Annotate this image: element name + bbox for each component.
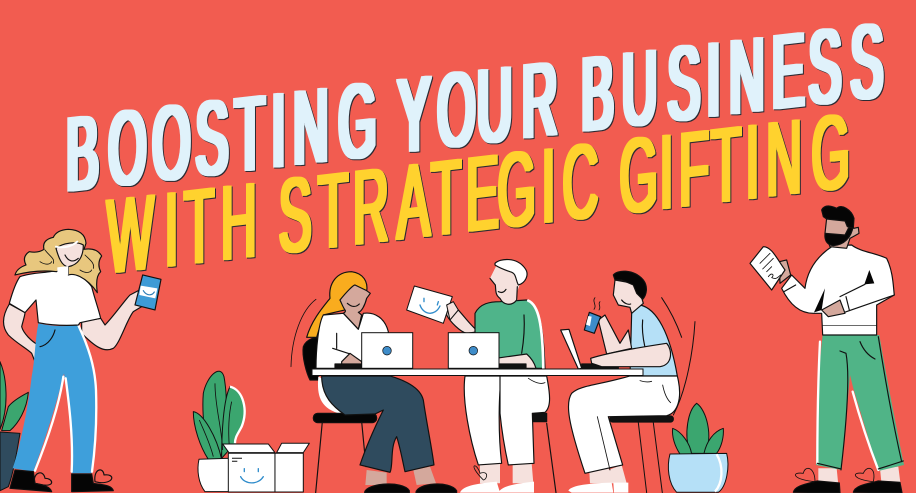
forearm [493,354,536,368]
sweater [475,300,545,368]
blue pot plant [668,403,728,492]
gift box [223,443,309,492]
smiley card [407,286,458,323]
document [750,247,785,290]
trousers [13,323,97,473]
potted plant [193,371,245,492]
forearm with mug [598,315,632,354]
underarm shadows [814,270,874,312]
feet [365,467,436,485]
collar [57,266,68,275]
seat [610,416,673,422]
front leg [500,376,550,465]
forearm [784,284,894,313]
phone [135,275,161,310]
title line 1: BOOSTING YOUR BUSINESS [66,2,883,214]
hair [307,272,367,337]
trousers [816,335,904,471]
beard [825,225,853,246]
face [825,218,859,248]
shirt [9,268,101,325]
laptop left [362,333,413,368]
flaps [223,444,275,453]
woman at table [291,272,457,493]
pot [198,458,230,492]
laptop screen [561,329,582,369]
man in blue [561,271,695,493]
ankles and shoes [480,463,533,483]
hair [822,206,854,228]
ankles [818,467,901,485]
table [312,333,643,376]
arm [591,343,671,367]
back leg [464,376,502,465]
left plant and pot [0,362,28,491]
shoes [365,484,457,493]
mug [584,312,601,333]
neck and face [490,265,521,304]
feet [589,465,627,483]
chair [638,298,695,493]
left arm [3,304,44,362]
bows [795,468,874,482]
face [56,243,83,267]
trousers [322,376,434,472]
man with document [750,206,904,493]
hair [613,271,646,299]
shoe bows [34,470,112,485]
blouse [316,313,390,368]
arm and card hand [447,303,478,333]
hair [15,229,102,293]
pot [668,453,728,492]
shoes [793,481,902,493]
lower hand [822,300,845,317]
face [340,285,370,329]
chair [316,422,366,493]
title line 2: WITH STRATEGIC GIFTING [107,93,850,296]
smile [241,469,263,483]
keyboard [335,364,363,369]
sweater [782,245,894,335]
shoes [10,470,52,492]
laptop right [448,333,499,368]
hair [495,260,527,285]
steam [594,298,600,310]
chair leg [547,423,556,493]
shirt [630,305,677,376]
face and neck [613,280,643,313]
right arm [82,291,143,350]
man in green [447,260,556,493]
woman with phone [3,229,161,492]
upper hand [779,260,791,283]
bows [474,466,487,480]
motion line [291,299,316,367]
keyboard [495,364,526,369]
trousers [568,376,680,473]
